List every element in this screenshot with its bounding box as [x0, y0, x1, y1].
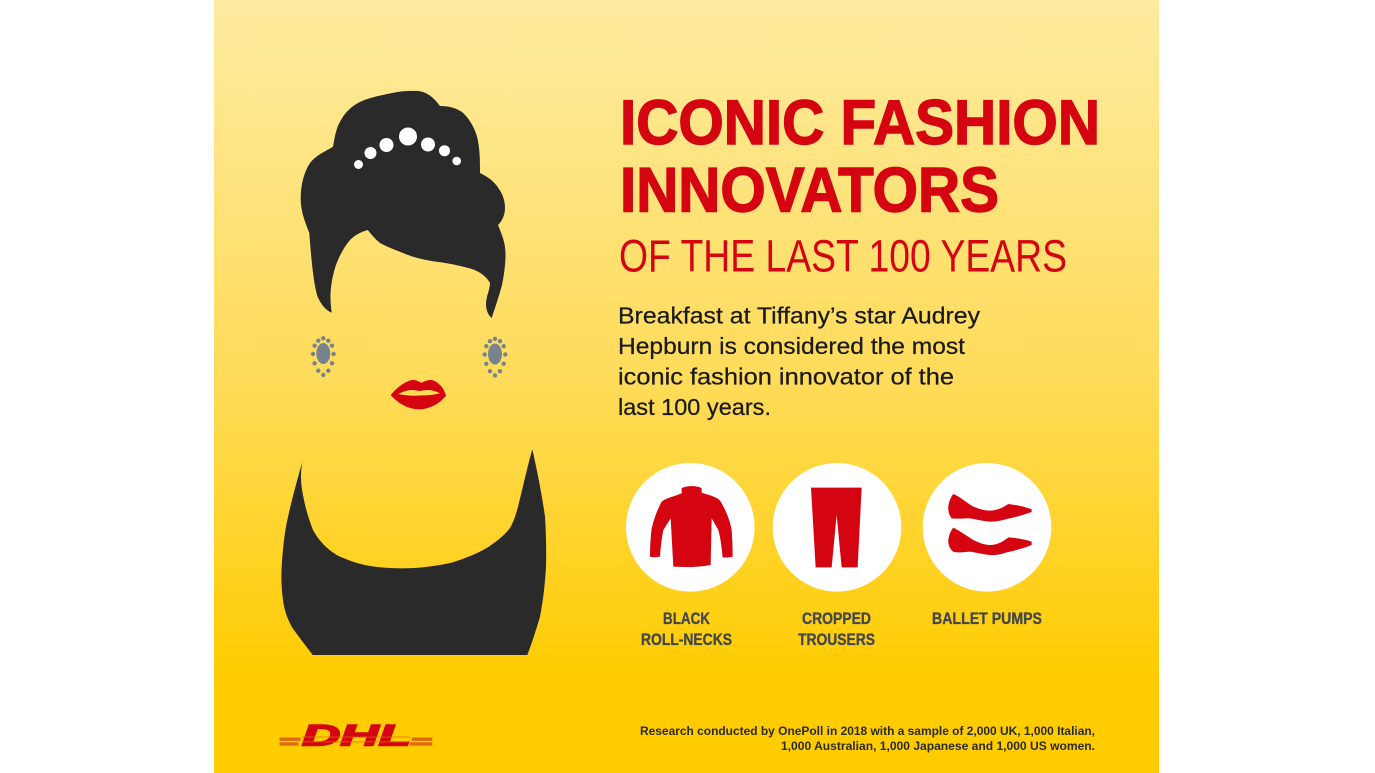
intro paragraph: Breakfast at Tiffany’s star Audrey — [618, 302, 981, 328]
research footnote: Research conducted by OnePoll in 2018 with a sample of 2,000 UK, 1,000 Italian, — [640, 726, 1095, 738]
illustration: Audrey Hepburn figure — [281, 91, 546, 655]
label: ROLL-NECKS — [641, 631, 732, 649]
intro paragraph — [618, 302, 981, 420]
icon: roll-neck jumper — [650, 486, 733, 567]
title — [619, 88, 1100, 282]
subtitle: OF THE LAST 100 YEARS — [619, 231, 1067, 282]
tiara pearls — [354, 128, 461, 169]
label — [798, 610, 875, 649]
title line: innovators: INNOVATORS — [620, 156, 999, 226]
background panel — [214, 0, 1159, 773]
research footnote: 1,000 Australian, 1,000 Japanese and 1,000 US women. — [781, 741, 1095, 753]
lips — [391, 380, 446, 409]
logo wordmark: DHL — [302, 720, 411, 752]
circle — [923, 463, 1051, 592]
black dress — [281, 449, 546, 655]
item: ballet pumps — [923, 463, 1051, 628]
intro paragraph: Hepburn is considered the most — [618, 333, 966, 359]
label: BALLET PUMPS — [932, 610, 1042, 628]
item: black roll-necks — [626, 463, 755, 649]
hair — [301, 91, 506, 318]
left earring — [311, 336, 336, 377]
intro paragraph: iconic fashion innovator of the — [618, 364, 954, 390]
label: BLACK — [663, 610, 710, 628]
circle — [626, 463, 755, 592]
item: cropped trousers — [773, 463, 901, 649]
label: CROPPED — [802, 610, 871, 628]
title line: iconic fashion: ICONIC FASHION — [620, 88, 1100, 158]
research footnote — [640, 726, 1095, 753]
label: TROUSERS — [798, 631, 875, 649]
icon: cropped trousers — [811, 488, 862, 567]
logo speed stripes — [280, 737, 432, 746]
DHL logo — [280, 720, 432, 752]
label — [641, 610, 732, 649]
intro paragraph: last 100 years. — [618, 394, 771, 420]
right earring — [482, 337, 507, 378]
icon: ballet pumps — [948, 494, 1032, 555]
circle — [773, 463, 901, 592]
